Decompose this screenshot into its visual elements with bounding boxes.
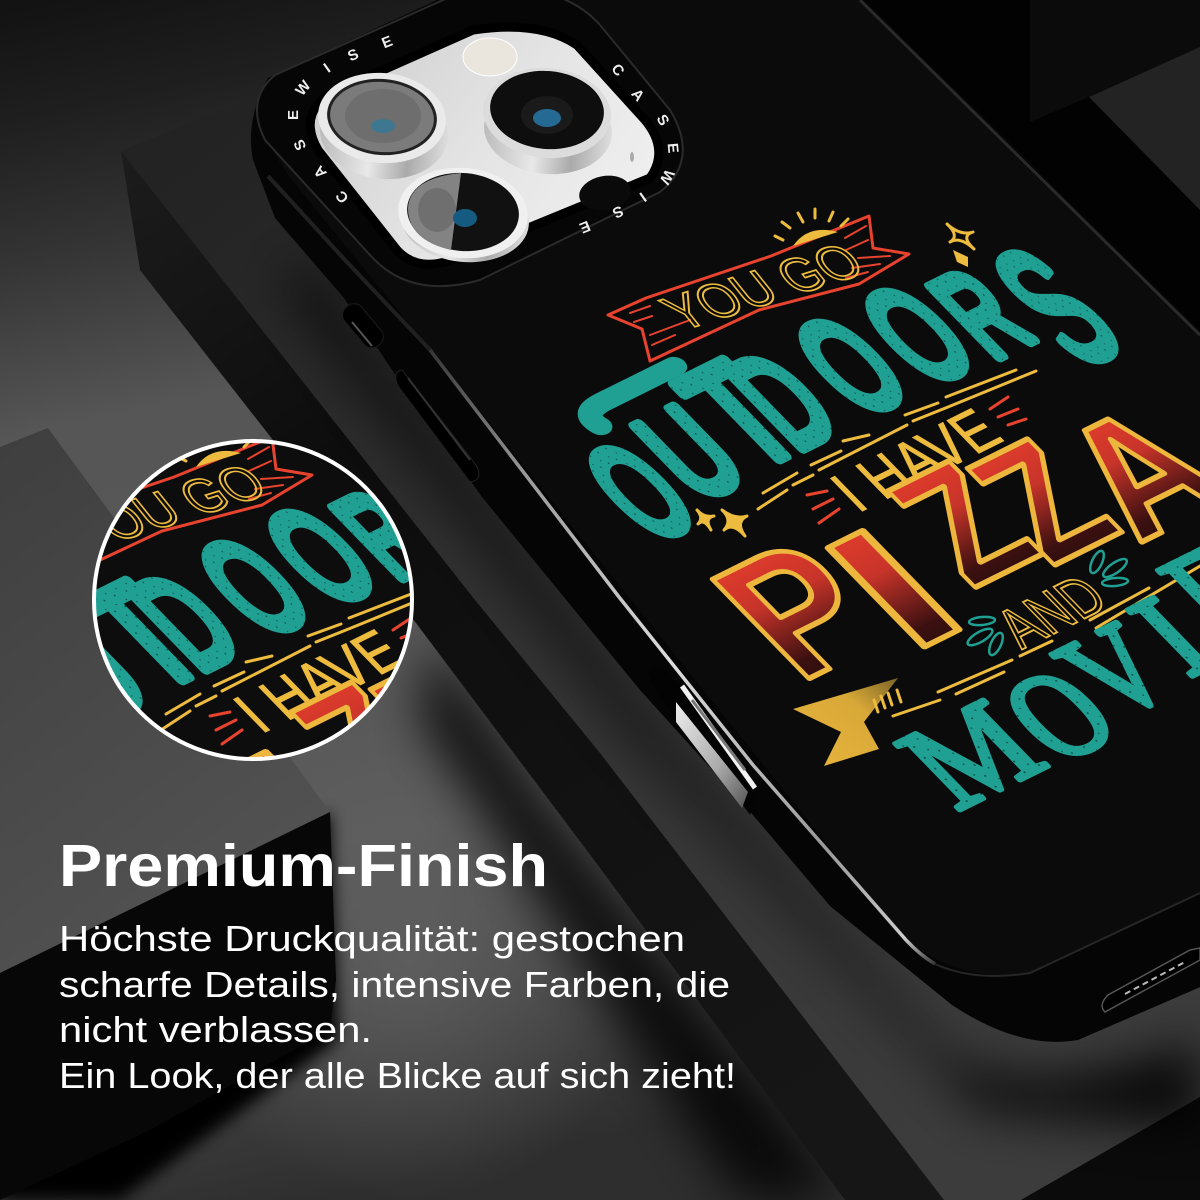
star filled xyxy=(953,250,968,267)
gold divider lines xyxy=(758,370,1200,716)
banner hatching xyxy=(630,226,890,345)
magnified artwork: O xyxy=(233,480,408,632)
star outline xyxy=(947,224,974,249)
t bar swash xyxy=(584,366,689,427)
text: outdoors: R xyxy=(903,246,1059,382)
icon: mute switch xyxy=(338,300,387,352)
brand ring text: S xyxy=(610,202,626,221)
brand ring text xyxy=(285,33,681,236)
brand ring text: S xyxy=(653,112,672,129)
magnified artwork: I xyxy=(186,714,407,906)
magnifier border xyxy=(94,441,412,759)
text: pizza: I xyxy=(783,493,1004,685)
brand ring text: W xyxy=(292,77,315,99)
text: pizza: P xyxy=(674,507,925,714)
camera bump xyxy=(257,0,683,286)
lens top-right xyxy=(479,63,616,179)
camera module xyxy=(257,0,683,286)
phone shadow xyxy=(290,260,1200,1130)
brand ring text: A xyxy=(628,86,648,105)
magnified artwork: O xyxy=(166,511,342,663)
right edge highlight xyxy=(860,0,1200,335)
lettering xyxy=(530,193,1200,851)
text: outdoors: O xyxy=(763,290,939,442)
brand ring text: W xyxy=(655,166,677,188)
flash xyxy=(463,38,517,76)
text: pizza: Z xyxy=(852,429,1075,619)
brand ring text: S xyxy=(345,46,361,65)
text: outdoors: T xyxy=(645,332,835,497)
brand ring text: C xyxy=(608,61,628,80)
lens top-left xyxy=(314,68,452,184)
microphone hole xyxy=(576,172,634,214)
magnified artwork: I HAVE xyxy=(220,618,419,745)
text: and: AND xyxy=(981,563,1121,660)
body text: Ein Look, der alle Blicke auf sich zieht! xyxy=(59,1055,736,1096)
body text xyxy=(59,918,736,1096)
text: movie: V xyxy=(1027,597,1200,743)
text: pizza xyxy=(710,416,1200,681)
text: i have: I HAVE xyxy=(817,397,1016,524)
icon: charging port xyxy=(1102,948,1200,1012)
text: outdoors: O xyxy=(830,259,1005,411)
text: you go: YOU GO xyxy=(650,234,876,341)
sensor dot xyxy=(630,152,634,162)
text: movie xyxy=(892,546,1200,812)
magnified artwork xyxy=(96,443,410,757)
magnified artwork: D xyxy=(100,547,272,697)
artwork on case xyxy=(578,208,1200,812)
icon: volume button xyxy=(396,370,479,482)
icon: power button xyxy=(648,668,757,815)
body text: Höchste Druckqualität: gestochen xyxy=(59,918,685,959)
stars beside title xyxy=(697,510,747,536)
left rim sheen xyxy=(268,176,432,352)
gold ribbon xyxy=(793,678,898,766)
heading: Premium-Finish xyxy=(59,833,548,899)
text: outdoors: O xyxy=(554,417,726,567)
banner xyxy=(608,216,909,361)
magnified artwork: Z xyxy=(334,628,557,818)
red accent dashes xyxy=(807,397,1026,523)
body text: scharfe Details, intensive Farben, die xyxy=(59,964,730,1005)
corner rim xyxy=(935,893,1200,976)
brand ring text: S xyxy=(291,137,310,153)
text: outdoors: U xyxy=(607,382,774,525)
magnified artwork: Z xyxy=(255,650,478,840)
magnified artwork: YOU GO xyxy=(53,455,279,562)
text: outdoors xyxy=(588,249,1119,538)
brand ring text: E xyxy=(577,217,593,236)
brand ring text: E xyxy=(379,33,395,52)
case back surface xyxy=(262,0,1200,975)
text: outdoors: D xyxy=(697,326,869,476)
brand ring text: A xyxy=(310,162,330,181)
magnifier circle xyxy=(92,439,414,761)
lens bottom xyxy=(394,163,532,267)
text: outdoors: S xyxy=(956,216,1157,398)
sun xyxy=(775,209,848,246)
text: pizza: Z xyxy=(931,407,1154,597)
brand ring text: I xyxy=(636,188,649,205)
phone case body xyxy=(251,0,1200,1042)
brand ring text: C xyxy=(332,187,352,206)
text: movie: O xyxy=(972,643,1146,787)
camera glass panel xyxy=(310,27,659,264)
text: movie: M xyxy=(870,675,1073,834)
brand ring text: I xyxy=(321,60,334,77)
magnified artwork: T xyxy=(48,553,238,718)
magnified artwork: U xyxy=(10,603,177,746)
brand ring text: E xyxy=(664,142,681,154)
left gloss highlight xyxy=(430,350,935,964)
ribbon ticks xyxy=(874,690,901,712)
magnified artwork: P xyxy=(77,728,328,935)
brand ring text: E xyxy=(285,110,302,120)
teal drops xyxy=(965,549,1129,657)
magnified artwork: R xyxy=(306,467,462,603)
body text: nicht verblassen. xyxy=(59,1009,372,1050)
